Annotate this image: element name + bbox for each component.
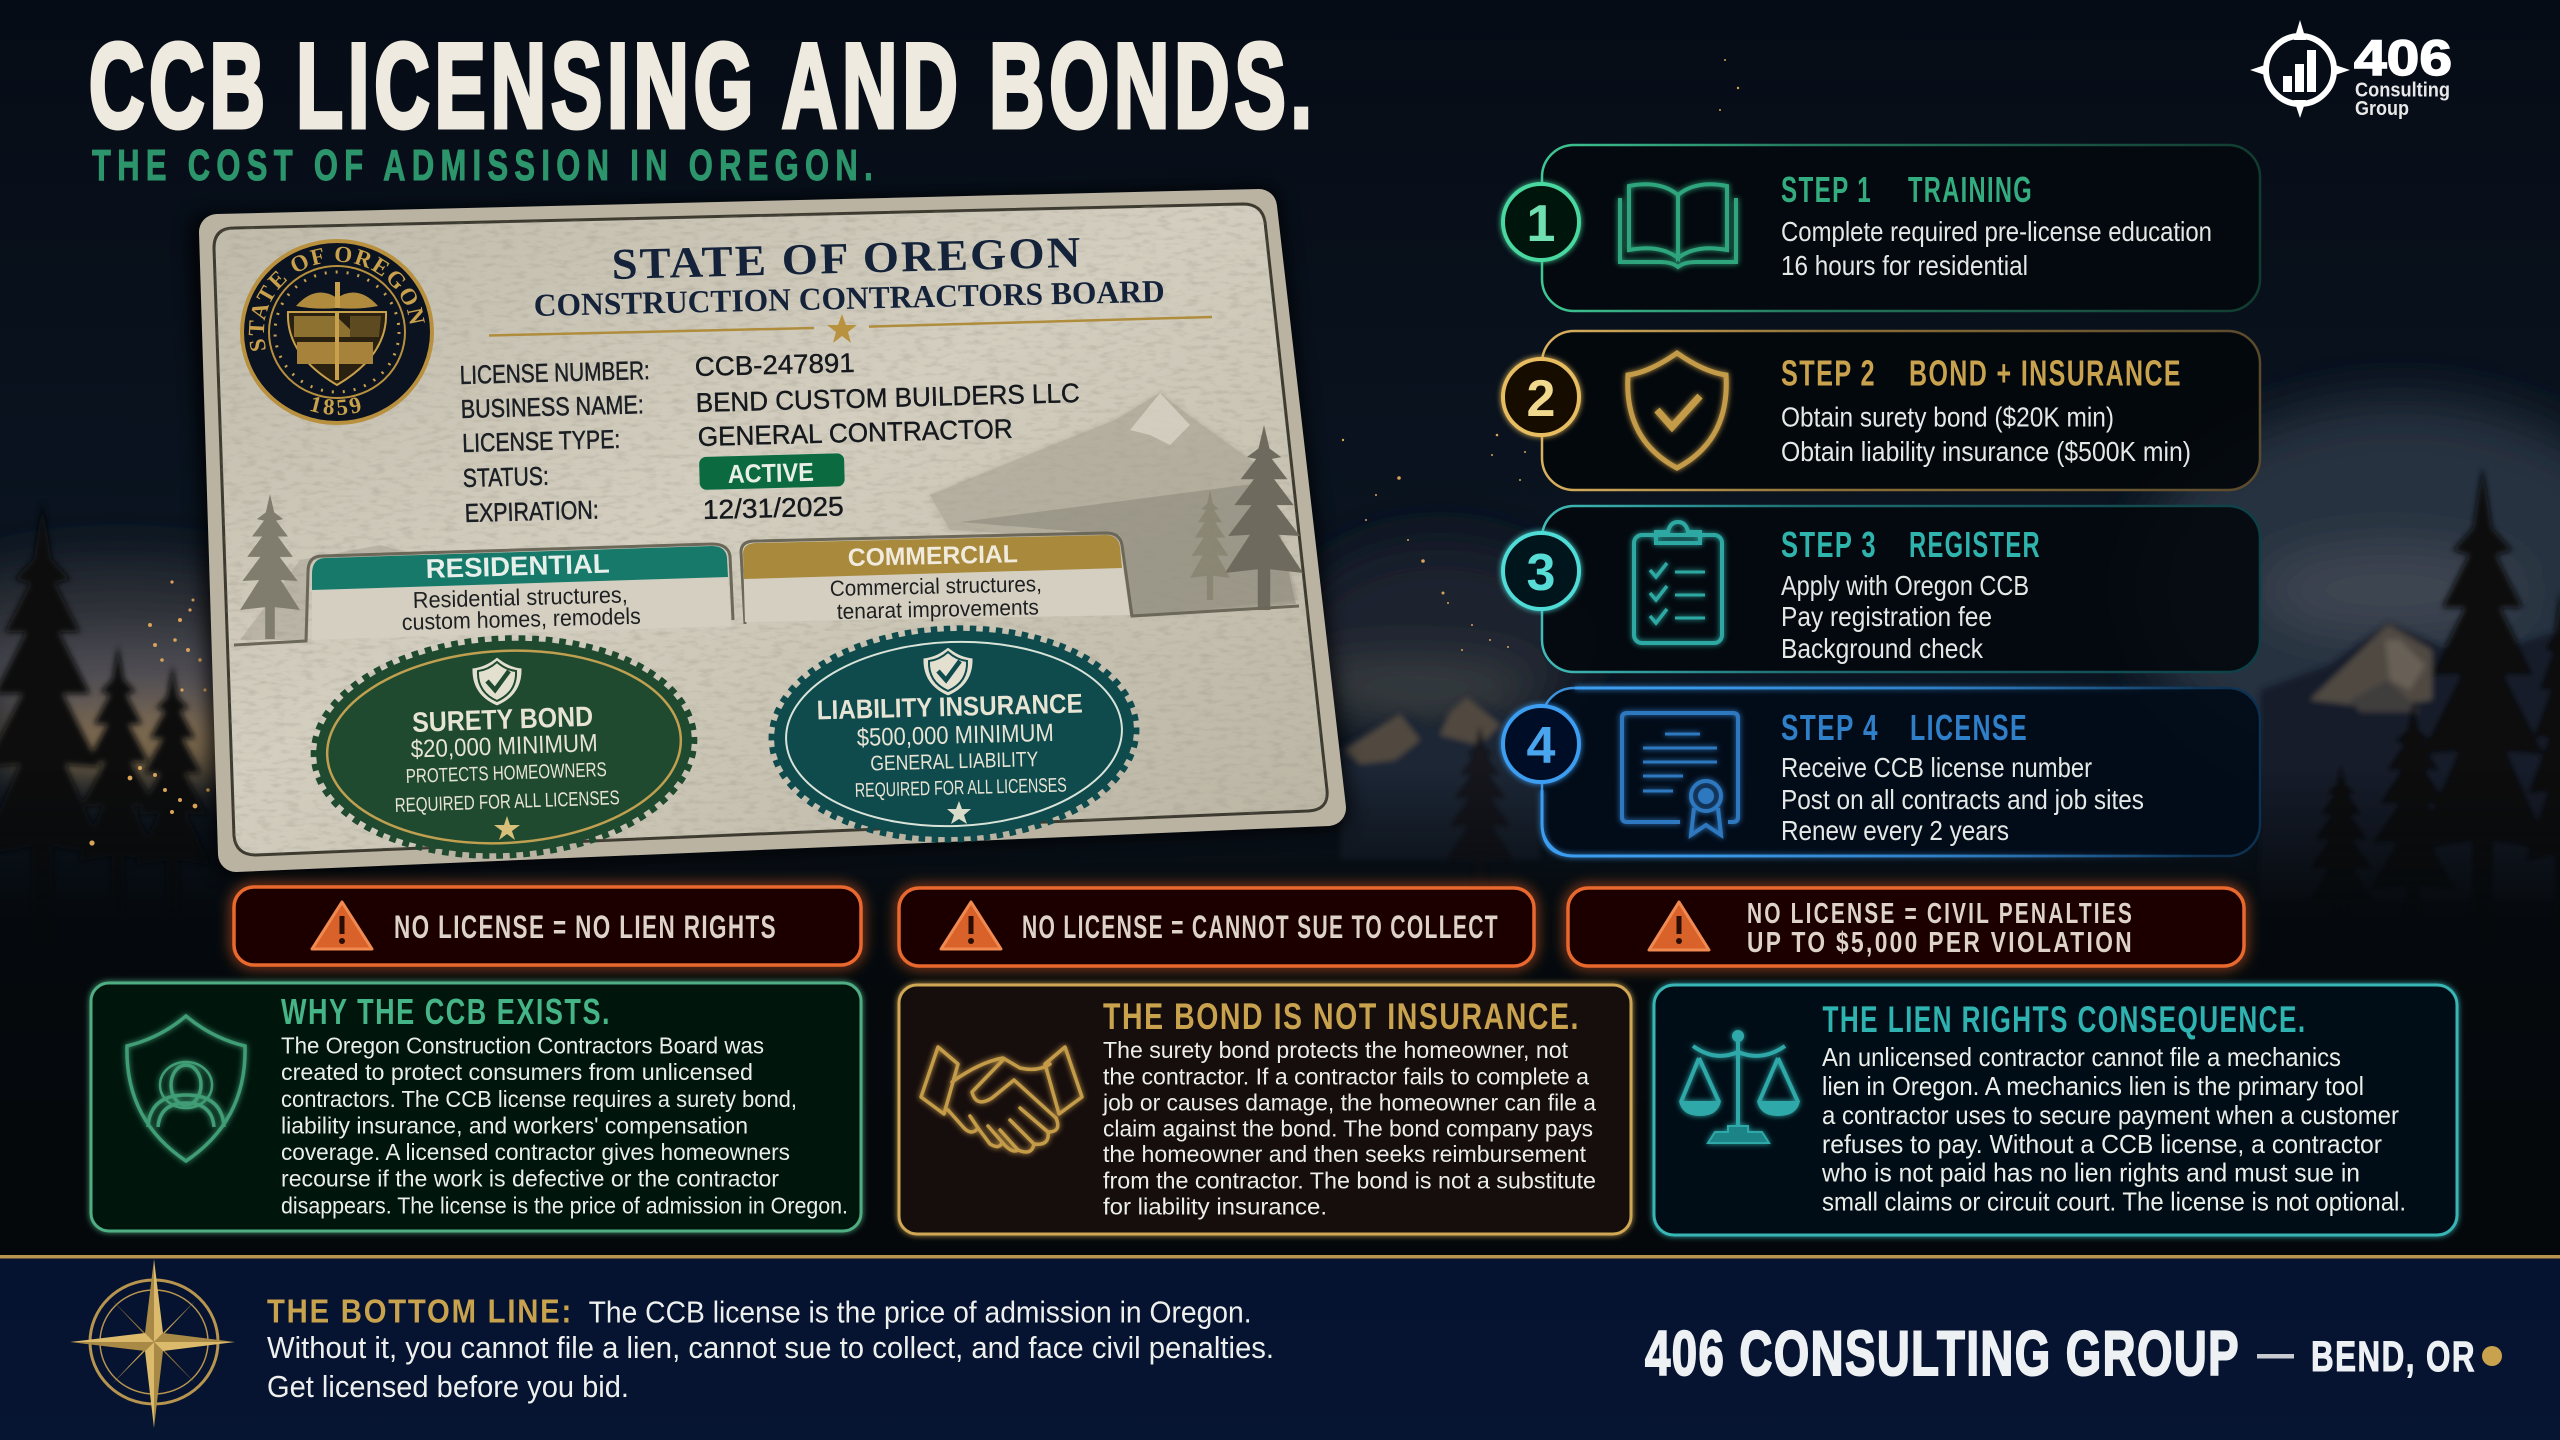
license details: LICENSE NUMBER: — [459, 355, 650, 390]
step 2 heading: BOND + INSURANCE — [1909, 352, 2182, 394]
badge: surety bond: SURETY BOND — [412, 701, 594, 738]
license details: CCB-247891 — [694, 348, 855, 382]
license card — [188, 186, 1356, 875]
license details: STATUS: — [462, 461, 549, 493]
license details: 12/31/2025 — [702, 491, 844, 525]
icon: warning triangle — [312, 902, 372, 949]
commercial tab — [741, 533, 1299, 624]
ccb body text: contractors. The CCB license requires a surety bond, — [281, 1086, 797, 1112]
subtitle: THE COST OF ADMISSION IN OREGON. — [92, 141, 879, 190]
bottom band — [0, 1255, 2560, 1440]
bond body text: the homeowner and then seeks reimbursement — [1103, 1141, 1586, 1167]
step 3 number: 3 — [1527, 544, 1555, 602]
badge: surety bond — [311, 631, 697, 863]
bond body text: for liability insurance. — [1103, 1194, 1327, 1220]
license details: GENERAL CONTRACTOR — [697, 414, 1013, 452]
residential tab: custom homes, remodels — [401, 603, 641, 635]
logo: Group — [2355, 98, 2409, 120]
company signature: BEND, OR — [2311, 1333, 2476, 1381]
state seal — [240, 239, 434, 425]
step 1 number — [1503, 184, 1579, 260]
bond body text — [1102, 1037, 1597, 1220]
license details: LICENSE TYPE: — [462, 424, 621, 458]
ccb body text: liability insurance, and workers' compensation — [281, 1112, 748, 1138]
icon: warning triangle — [1649, 902, 1709, 950]
step 4 text: Post on all contracts and job sites — [1781, 784, 2144, 815]
badge: liability insurance: REQUIRED FOR ALL LICENSES — [855, 774, 1067, 802]
badge: surety bond: $20,000 MINIMUM — [410, 729, 598, 764]
ccb body text — [281, 1033, 848, 1218]
commercial tab: Commercial structures, — [830, 571, 1042, 601]
step 4 number: 4 — [1527, 717, 1556, 775]
lien body text: a contractor uses to secure payment when a customer — [1822, 1100, 2399, 1130]
penalties text: NO LICENSE = CIVIL PENALTIES — [1747, 898, 2134, 930]
panel: the bond is not insurance — [899, 985, 1631, 1234]
icon: shield check — [1628, 353, 1726, 468]
step 2 heading — [1781, 352, 2182, 394]
step 2 text: Obtain surety bond ($20K min) — [1781, 402, 2114, 432]
bottom line statement: The CCB license is the price of admission in Oregon. — [589, 1295, 1252, 1330]
badge: liability insurance: $500,000 MINIMUM — [856, 719, 1054, 752]
company signature: 406 CONSULTING GROUP — [1645, 1319, 2240, 1389]
alert: civil penalties — [1568, 888, 2244, 966]
ccb body text: disappears. The license is the price of admission in Oregon. — [281, 1192, 848, 1218]
panel: step 2 bond + insurance — [1503, 331, 2260, 490]
step 2 text — [1781, 402, 2191, 467]
lien body text: who is not paid has no lien rights and must sue in — [1821, 1158, 2360, 1188]
icon: scales of justice — [1679, 1030, 1800, 1143]
penalties text: UP TO $5,000 PER VIOLATION — [1747, 927, 2134, 959]
license details: EXPIRATION: — [464, 495, 599, 528]
ccb body text: created to protect consumers from unlicensed — [281, 1059, 753, 1085]
panel: why the CCB exists — [91, 983, 861, 1231]
license details — [459, 348, 1080, 528]
residential tab: RESIDENTIAL — [425, 549, 610, 584]
ccb body text: recourse if the work is defective or the contractor — [281, 1166, 779, 1192]
lien body text: lien in Oregon. A mechanics lien is the primary tool — [1822, 1071, 2364, 1101]
license details: BUSINESS NAME: — [460, 389, 644, 424]
panel: step 3 register — [1503, 506, 2260, 672]
panel: the bond is not insurance: THE BOND IS NOT INSURANCE. — [1103, 996, 1580, 1037]
badge: surety bond: REQUIRED FOR ALL LICENSES — [394, 787, 620, 817]
state seal: 1859 — [310, 397, 360, 415]
step 4 heading: LICENSE — [1910, 707, 2028, 748]
badge: liability insurance: LIABILITY INSURANCE — [816, 688, 1083, 725]
lien body text: small claims or circuit court. The license is not optional. — [1822, 1187, 2406, 1217]
residential tab — [234, 544, 733, 645]
alert: no lien rights: NO LICENSE = NO LIEN RIGHTS — [394, 909, 777, 945]
panel: step 4 license — [1503, 688, 2260, 856]
step 4 number — [1503, 706, 1579, 782]
residential tab: Residential structures, — [412, 581, 628, 613]
title: CCB LICENSING AND BONDS. — [89, 19, 1317, 153]
lien body text — [1821, 1042, 2406, 1217]
icon: shield with person — [127, 1016, 245, 1161]
panel: the lien rights consequence — [1654, 985, 2457, 1235]
icon: handshake — [921, 1047, 1082, 1152]
step 3 heading: REGISTER — [1909, 524, 2041, 565]
license details: ACTIVE — [727, 457, 814, 489]
step 2 number: 2 — [1527, 370, 1555, 428]
step 2 heading: STEP 2 — [1781, 352, 1876, 394]
icon: gold compass rose — [70, 1259, 235, 1428]
step 1 heading: TRAINING — [1908, 169, 2033, 210]
panel: why the CCB exists: WHY THE CCB EXISTS. — [281, 991, 611, 1032]
logo — [2250, 20, 2452, 120]
badge: liability insurance — [771, 625, 1137, 843]
card heading — [489, 228, 1212, 343]
bond body text: from the contractor. The bond is not a substitute — [1103, 1167, 1596, 1193]
bond body text: the contractor. If a contractor fails to complete a — [1103, 1064, 1590, 1090]
step 4 text — [1781, 752, 2144, 846]
alert: no lien rights — [234, 887, 861, 965]
bottom line statement: THE BOTTOM LINE: — [267, 1293, 573, 1330]
step 3 heading: STEP 3 — [1781, 524, 1877, 565]
step 1 number: 1 — [1527, 195, 1555, 253]
card heading: STATE OF OREGON — [611, 228, 1083, 289]
card heading: CONSTRUCTION CONTRACTORS BOARD — [533, 273, 1165, 323]
logo: 406 — [2354, 30, 2452, 86]
timeline connector — [1539, 261, 1543, 705]
logo: Consulting — [2355, 80, 2450, 102]
step 3 heading — [1781, 524, 2041, 565]
step 3 text: Background check — [1781, 633, 1983, 664]
step 2 number — [1503, 359, 1579, 435]
commercial tab: tenarat improvements — [837, 594, 1039, 624]
step 4 heading — [1781, 707, 2028, 748]
ccb body text: The Oregon Construction Contractors Board was — [281, 1033, 764, 1059]
step 1 heading: STEP 1 — [1781, 169, 1872, 210]
icon: clipboard checklist — [1634, 522, 1722, 643]
step 3 number — [1503, 533, 1579, 609]
step 3 text — [1781, 570, 2029, 664]
bottom line statement: Without it, you cannot file a lien, cannot sue to collect, and face civil penalties. — [267, 1330, 1274, 1365]
badge: liability insurance: GENERAL LIABILITY — [870, 748, 1039, 775]
badge: surety bond: PROTECTS HOMEOWNERS — [405, 759, 607, 788]
step 4 heading: STEP 4 — [1781, 707, 1879, 748]
step 1 heading — [1781, 169, 2033, 210]
icon: open book — [1620, 184, 1736, 267]
lien body text: An unlicensed contractor cannot file a mechanics — [1822, 1042, 2341, 1072]
step 1 text — [1781, 216, 2212, 281]
icon: warning triangle — [941, 902, 1001, 949]
alert: cannot sue to collect: NO LICENSE = CANNOT SUE TO COLLECT — [1022, 909, 1499, 945]
step 3 text: Pay registration fee — [1781, 601, 1992, 632]
state seal: STATE OF OREGON — [248, 246, 425, 351]
panel: step 1 training — [1503, 145, 2260, 311]
commercial tab: COMMERCIAL — [848, 540, 1018, 572]
bottom line statement — [267, 1293, 1274, 1404]
bond body text: claim against the bond. The bond company pays — [1103, 1116, 1593, 1142]
step 4 text: Renew every 2 years — [1781, 815, 2009, 846]
step 2 text: Obtain liability insurance ($500K min) — [1781, 436, 2191, 467]
step 1 text: 16 hours for residential — [1781, 250, 2028, 281]
ccb body text: coverage. A licensed contractor gives homeowners — [281, 1139, 790, 1165]
panel: the lien rights consequence: THE LIEN RIGHTS CONSEQUENCE. — [1822, 999, 2306, 1040]
alert: cannot sue to collect — [899, 888, 1534, 966]
bond body text: job or causes damage, the homeowner can file a — [1102, 1090, 1597, 1116]
license details: BEND CUSTOM BUILDERS LLC — [695, 378, 1080, 418]
engraved mountain landscape — [240, 393, 1303, 640]
step 3 text: Apply with Oregon CCB — [1781, 570, 2029, 601]
step 1 text: Complete required pre-license education — [1781, 216, 2212, 247]
lien body text: refuses to pay. Without a CCB license, a contractor — [1822, 1129, 2382, 1159]
penalties text — [1747, 898, 2134, 959]
bond body text: The surety bond protects the homeowner, not — [1103, 1037, 1568, 1063]
bottom line statement: Get licensed before you bid. — [267, 1369, 629, 1404]
icon: certificate — [1622, 713, 1738, 835]
step 4 text: Receive CCB license number — [1781, 752, 2092, 783]
